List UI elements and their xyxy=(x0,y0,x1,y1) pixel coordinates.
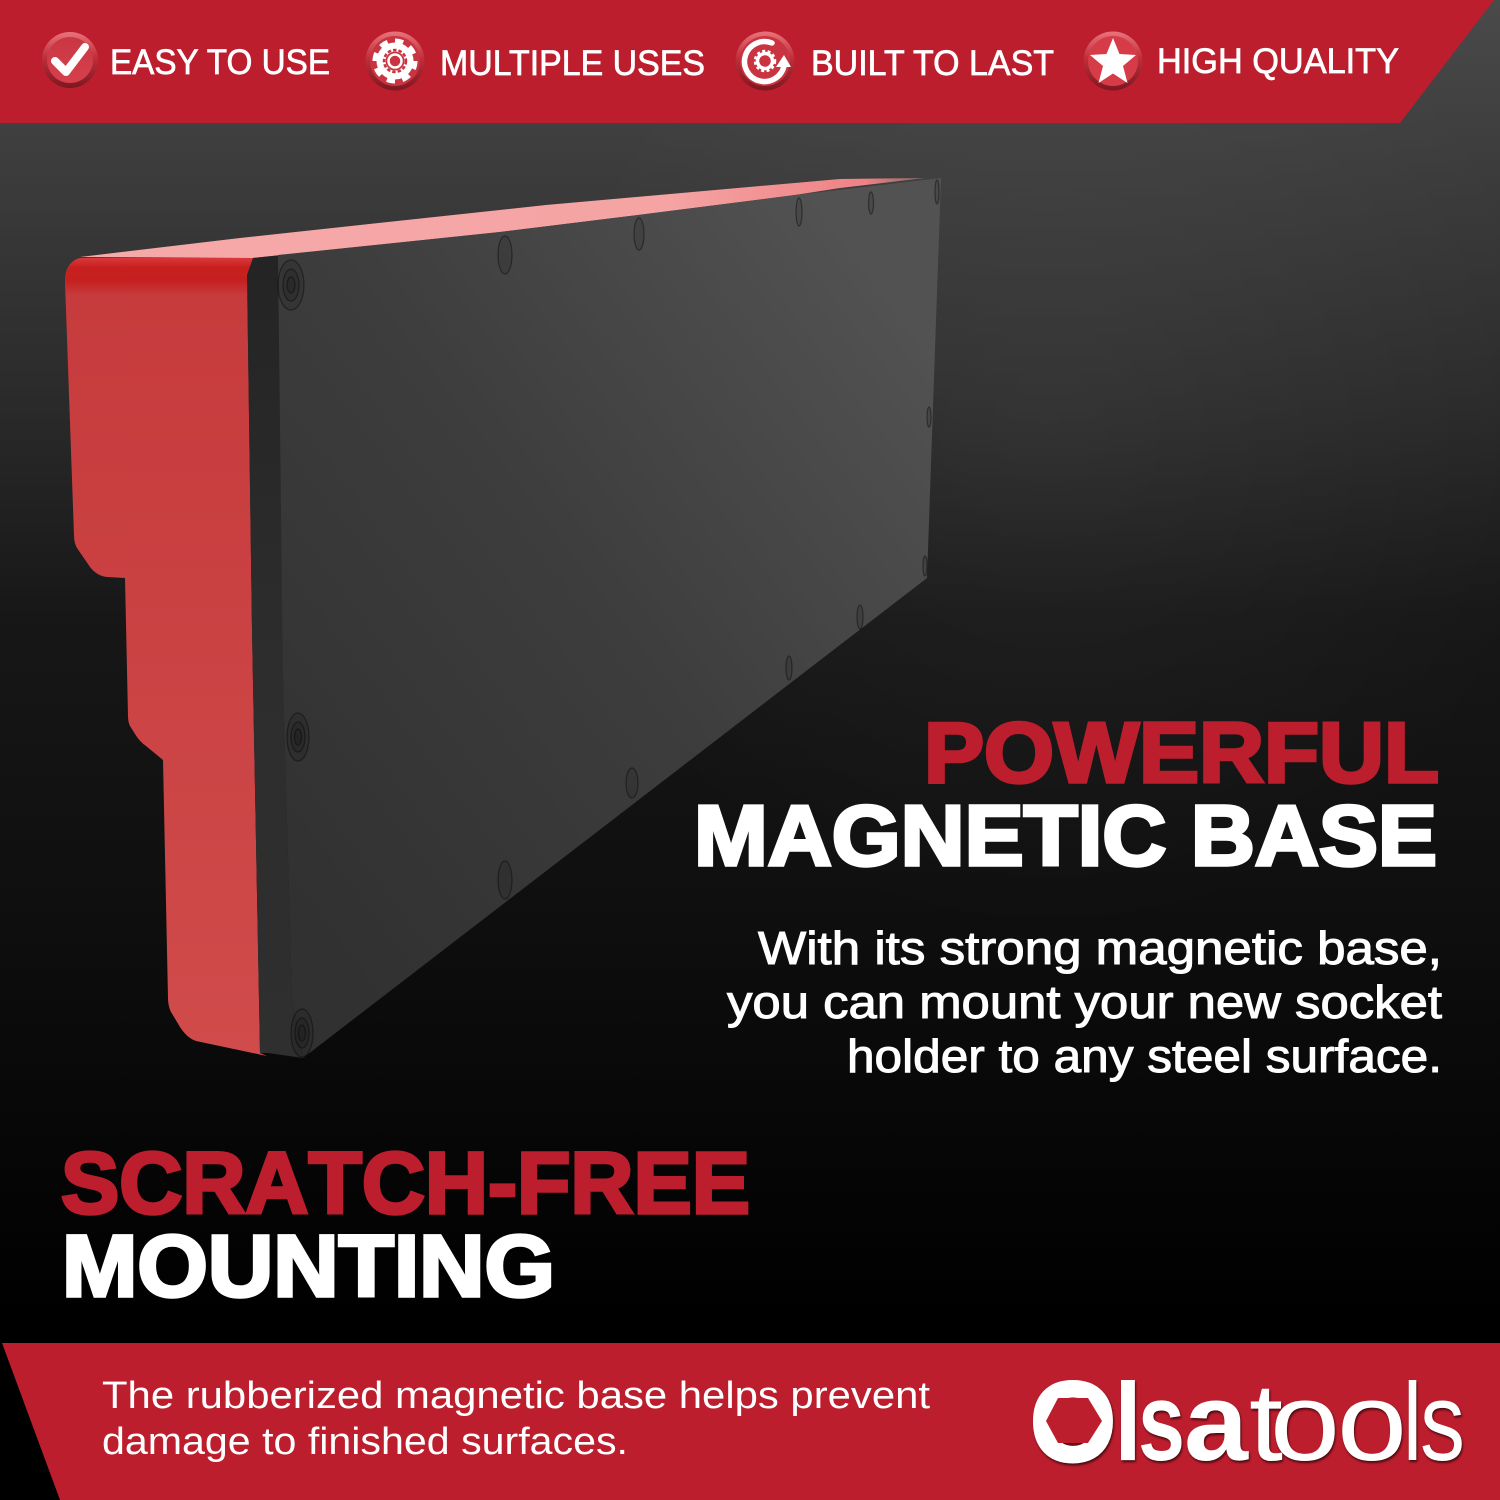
text block: scratch-free description: damage to finished surfaces. xyxy=(102,1421,628,1463)
top banner xyxy=(0,0,1494,123)
black bevel xyxy=(247,255,303,1058)
badge: multiple uses xyxy=(366,32,705,90)
logo: Olsatools: s xyxy=(1138,1361,1185,1484)
heading: scratch-free mounting: MOUNTING xyxy=(62,1218,555,1315)
label: MULTIPLE USES xyxy=(440,44,705,83)
logo: Olsatools: o xyxy=(1337,1361,1407,1484)
logo: Olsatools: t xyxy=(1249,1361,1283,1484)
label: BUILT TO LAST xyxy=(811,44,1054,83)
red top edge highlight xyxy=(65,258,253,295)
logo: Olsatools: l xyxy=(1114,1361,1142,1484)
icon: gear xyxy=(366,32,424,90)
badge: easy to use xyxy=(42,32,330,88)
logo: Olsatools: O xyxy=(1031,1361,1115,1484)
product: magnetic socket holder base xyxy=(65,178,941,1058)
icon: cycle gear xyxy=(736,32,794,90)
text block: magnetic base description: holder to any steel surface. xyxy=(847,1030,1442,1082)
badge: high quality xyxy=(1084,32,1399,90)
text block: magnetic base description: you can mount your new socket xyxy=(727,976,1442,1028)
logo: Olsatools: l xyxy=(1403,1361,1422,1484)
logo: Olsatools: a xyxy=(1184,1361,1249,1484)
heading: scratch-free mounting: SCRATCH-FREE xyxy=(61,1135,750,1232)
logo: Olsatools: o xyxy=(1270,1361,1340,1484)
heading: powerful magnetic base: MAGNETIC BASE xyxy=(694,789,1437,884)
icon: check xyxy=(42,32,98,88)
text block: magnetic base description: With its strong magnetic base, xyxy=(758,922,1442,974)
heading: scratch-free mounting xyxy=(61,1135,750,1315)
text block: scratch-free description: The rubberized magnetic base helps prevent xyxy=(102,1375,930,1417)
red side face xyxy=(65,258,267,1056)
logo: Olsatools: s xyxy=(1420,1361,1465,1484)
logo: Olsatools xyxy=(1031,1361,1465,1484)
label: EASY TO USE xyxy=(110,43,330,82)
label: HIGH QUALITY xyxy=(1157,42,1399,81)
pink top strip xyxy=(80,178,925,258)
text block: scratch-free description xyxy=(102,1375,930,1463)
heading: powerful magnetic base: POWERFUL xyxy=(924,706,1439,801)
heading: powerful magnetic base xyxy=(694,706,1439,884)
icon: star xyxy=(1084,32,1142,90)
badge: built to last xyxy=(736,32,1054,90)
bottom banner xyxy=(2,1343,1500,1500)
text block: magnetic base description xyxy=(727,922,1442,1082)
mounting screws xyxy=(278,180,939,1057)
plate face xyxy=(278,178,941,1058)
